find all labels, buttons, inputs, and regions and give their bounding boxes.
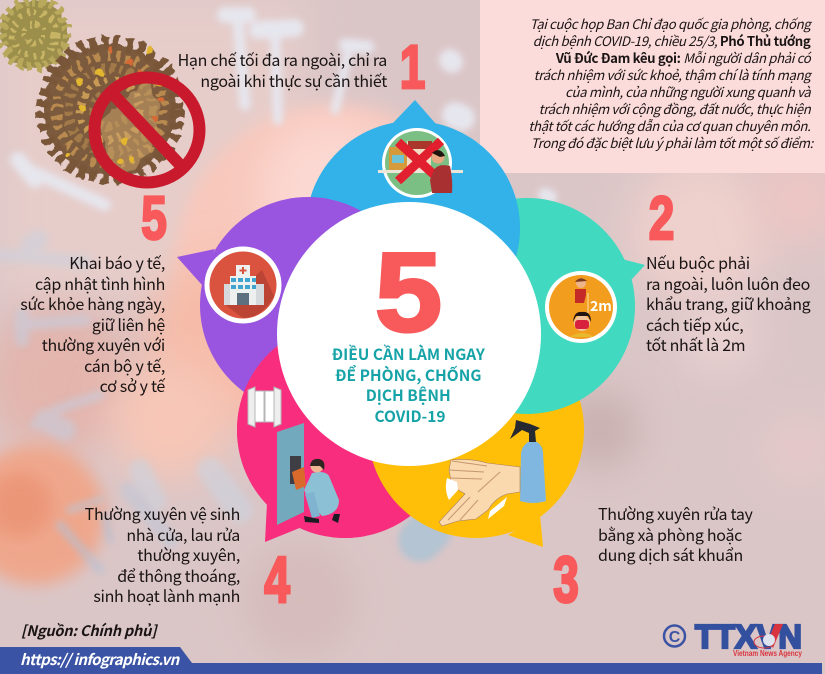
text: step 1: ngoài khi thực sự cần thiết bbox=[200, 68, 387, 92]
text: step 4: để thông thoáng, bbox=[117, 563, 240, 587]
icon: keep 2m distance bbox=[545, 271, 617, 343]
petal 4: pink bbox=[237, 322, 453, 542]
intro panel: dịch bệnh COVID-19, chiều 25/3, Phó Thủ tướng bbox=[533, 31, 810, 50]
number 3: 3 bbox=[553, 543, 579, 616]
icon: hand washing and sanitizer bbox=[439, 420, 546, 526]
number 1: 1 bbox=[400, 34, 425, 102]
pink overlap over purple bbox=[237, 346, 365, 538]
petal 5: purple bbox=[177, 197, 416, 413]
brown virus bbox=[42, 42, 178, 178]
centre title: DỊCH BỆNH bbox=[366, 384, 451, 406]
icon: virus with prohibition sign bbox=[0, 0, 200, 182]
text: step 4: thường xuyên, bbox=[137, 542, 240, 566]
spikes bbox=[0, 15, 550, 570]
petal 3: yellow bbox=[368, 322, 584, 547]
text: step 3: dung dịch sát khuẩn bbox=[598, 542, 743, 566]
icon: cleaning windows and doors bbox=[248, 387, 340, 525]
text: step 2: ra ngoài, luôn luôn đeo bbox=[646, 271, 810, 295]
centre heading bbox=[332, 229, 488, 427]
text: step 5: sức khỏe hàng ngày, bbox=[20, 291, 165, 315]
intro panel: Vũ Đức Đam kêu gọi: Mỗi người dân phải có bbox=[556, 48, 810, 67]
number 2: 2 bbox=[649, 185, 674, 253]
icon: keep 2m distance: 2m bbox=[590, 296, 612, 316]
intro panel: trách nhiệm với cộng đồng, đất nước, thực hiện bbox=[539, 99, 812, 118]
centre title: ĐỂ PHÒNG, CHỐNG bbox=[335, 364, 481, 386]
step numbers bbox=[141, 34, 674, 616]
text: step 4: Thường xuyên vệ sinh bbox=[85, 501, 240, 525]
window bbox=[248, 387, 281, 427]
text: step 2: khẩu trang, giữ khoảng bbox=[646, 291, 811, 315]
text: step 5: Khai báo y tế, bbox=[69, 250, 165, 274]
hands bbox=[439, 459, 520, 526]
petal 1: blue bbox=[306, 100, 520, 335]
person wiping bbox=[292, 459, 340, 523]
icon: hospital bbox=[204, 246, 282, 324]
intro panel: thật tốt các hướng dẫn của cơ quan chuyên môn. bbox=[528, 116, 811, 135]
centre title: ĐIỀU CẦN LÀM NGAY bbox=[332, 343, 486, 365]
door bbox=[277, 423, 304, 525]
logo: TTXVN bbox=[664, 618, 802, 658]
text: step 3: Thường xuyên rửa tay bbox=[598, 501, 754, 525]
red V stroke and globe bbox=[754, 624, 783, 648]
copyright mark: C bbox=[669, 629, 681, 646]
wordmark: TTXVN bbox=[695, 618, 802, 655]
centre title: COVID-19 bbox=[374, 405, 446, 427]
big number 5: 5 bbox=[375, 229, 442, 355]
text: step 2: cách tiếp xúc, bbox=[646, 312, 743, 336]
flower diagram bbox=[177, 100, 645, 547]
text: step 5: cán bộ y tế, bbox=[84, 353, 165, 377]
text: step 5: cập nhật tình hình bbox=[35, 271, 165, 295]
text: step 1: Hạn chế tối đa ra ngoài, chỉ ra bbox=[178, 47, 387, 71]
petal 2: teal bbox=[419, 198, 645, 414]
text: step 2: Nếu buộc phải bbox=[646, 250, 750, 274]
intro panel: Trong đó đặc biệt lưu ý phải làm tốt một số điểm: bbox=[531, 133, 815, 152]
number 4: 4 bbox=[264, 543, 290, 616]
small olive virus bbox=[0, 0, 68, 68]
prohibition sign bbox=[94, 78, 200, 182]
agency tagline: Vietnam News Agency bbox=[733, 649, 802, 658]
text: step 5: giữ liên hệ bbox=[92, 312, 165, 336]
number 5: 5 bbox=[141, 185, 167, 253]
footer bar bbox=[0, 647, 822, 674]
spray bottle bbox=[510, 420, 546, 503]
footer url: https:// infographics.vn bbox=[20, 649, 181, 670]
source note: [Nguồn: Chính phủ] bbox=[21, 620, 158, 641]
intro panel bbox=[480, 0, 825, 173]
text: step 4: sinh hoạt lành mạnh bbox=[93, 583, 240, 607]
text: step 3: bằng xà phòng hoặc bbox=[598, 522, 742, 546]
text: step 4: nhà cửa, lau rửa bbox=[126, 522, 240, 546]
text: step 5: thường xuyên với bbox=[42, 332, 165, 356]
text: step 5: cơ sở y tế bbox=[100, 373, 165, 397]
text: step 2: tốt nhất là 2m bbox=[646, 332, 745, 356]
intro panel: của mình, của những người xung quanh và bbox=[565, 82, 811, 101]
intro panel: Tại cuộc họp Ban Chỉ đạo quốc gia phòng, chống bbox=[530, 14, 812, 33]
centre circle bbox=[277, 202, 541, 466]
icon: stay home bbox=[378, 128, 463, 198]
intro panel: trách nhiệm với sức khoẻ, thậm chí là tính mạng bbox=[534, 65, 812, 84]
